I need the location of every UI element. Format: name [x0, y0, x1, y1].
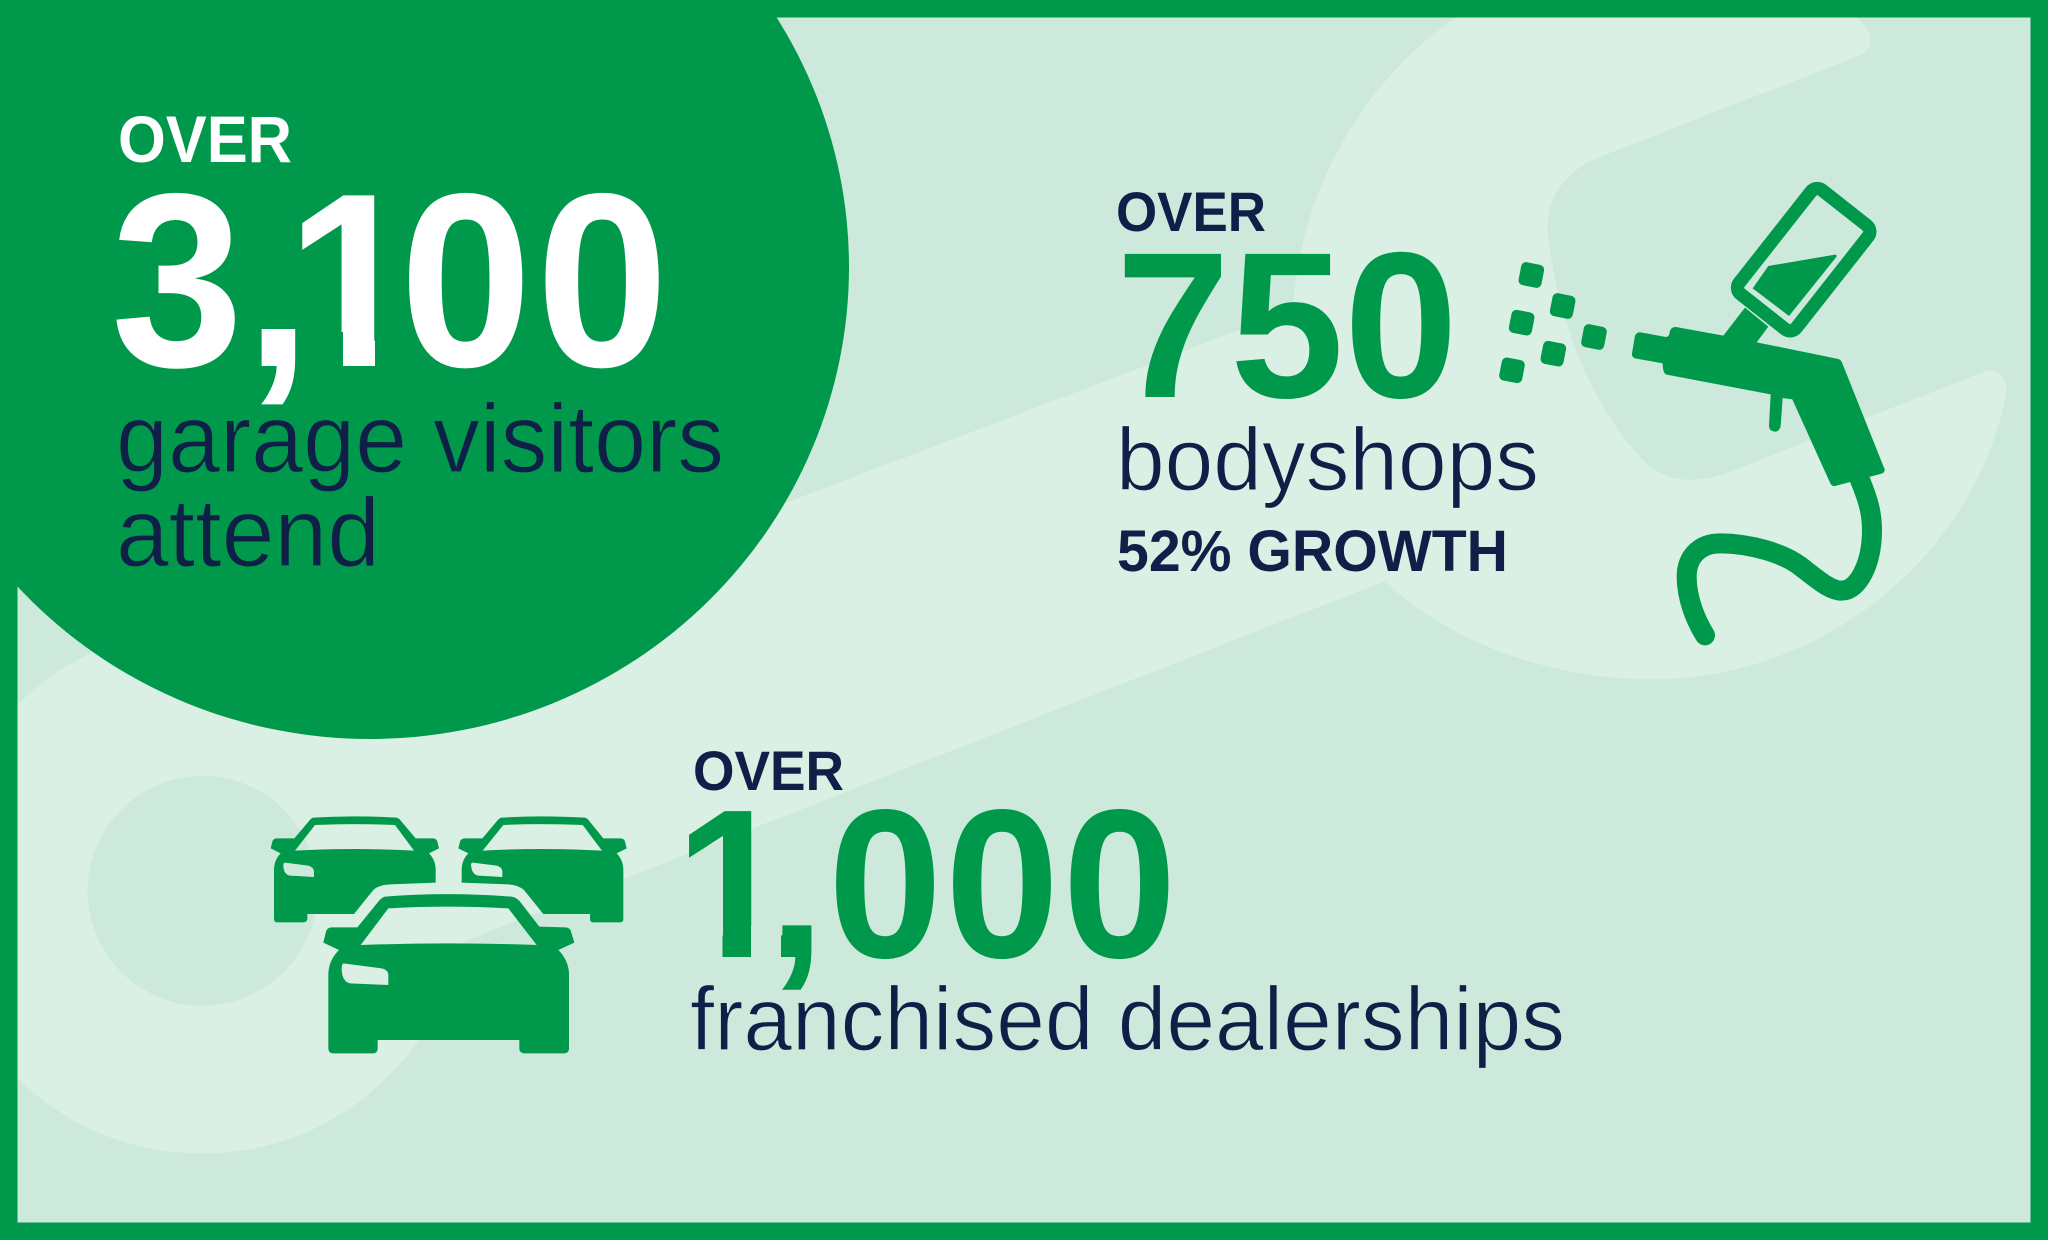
- growth note: 52% GROWTH: [1117, 519, 1508, 584]
- paint level: [1753, 255, 1837, 316]
- label: over: OVER: [118, 102, 292, 176]
- foot trim for the digit 1: [680, 926, 781, 960]
- label: over: OVER: [693, 739, 844, 802]
- number: 3,100: 3,100: [111, 142, 668, 419]
- car: front: [323, 894, 574, 1053]
- green circle panel: [0, 0, 849, 739]
- car: back left: [271, 816, 439, 922]
- spray droplets: [1498, 261, 1608, 384]
- caption: bodyshops: bodyshops: [1116, 409, 1539, 509]
- stat: garage visitors: [111, 102, 724, 587]
- car: back right: [458, 816, 627, 922]
- paint cup outline: [1734, 185, 1873, 334]
- label: over: OVER: [1116, 180, 1266, 243]
- icon: spray gun: [1498, 185, 1885, 635]
- hose: [1687, 480, 1872, 635]
- caption line: garage visitors: garage visitors: [116, 384, 724, 493]
- stat: bodyshops: [1116, 180, 1539, 584]
- foot trim for the digit 1: [296, 332, 417, 369]
- gun body: [1632, 308, 1885, 486]
- caption line: attend: attend: [116, 478, 380, 587]
- number: 1,000: 1,000: [675, 766, 1177, 1003]
- caption: franchised dealerships: franchised dealerships: [690, 970, 1565, 1070]
- stat: franchised dealerships: [675, 739, 1565, 1070]
- icon: three cars: [271, 816, 627, 1053]
- number: 750: 750: [1116, 210, 1458, 442]
